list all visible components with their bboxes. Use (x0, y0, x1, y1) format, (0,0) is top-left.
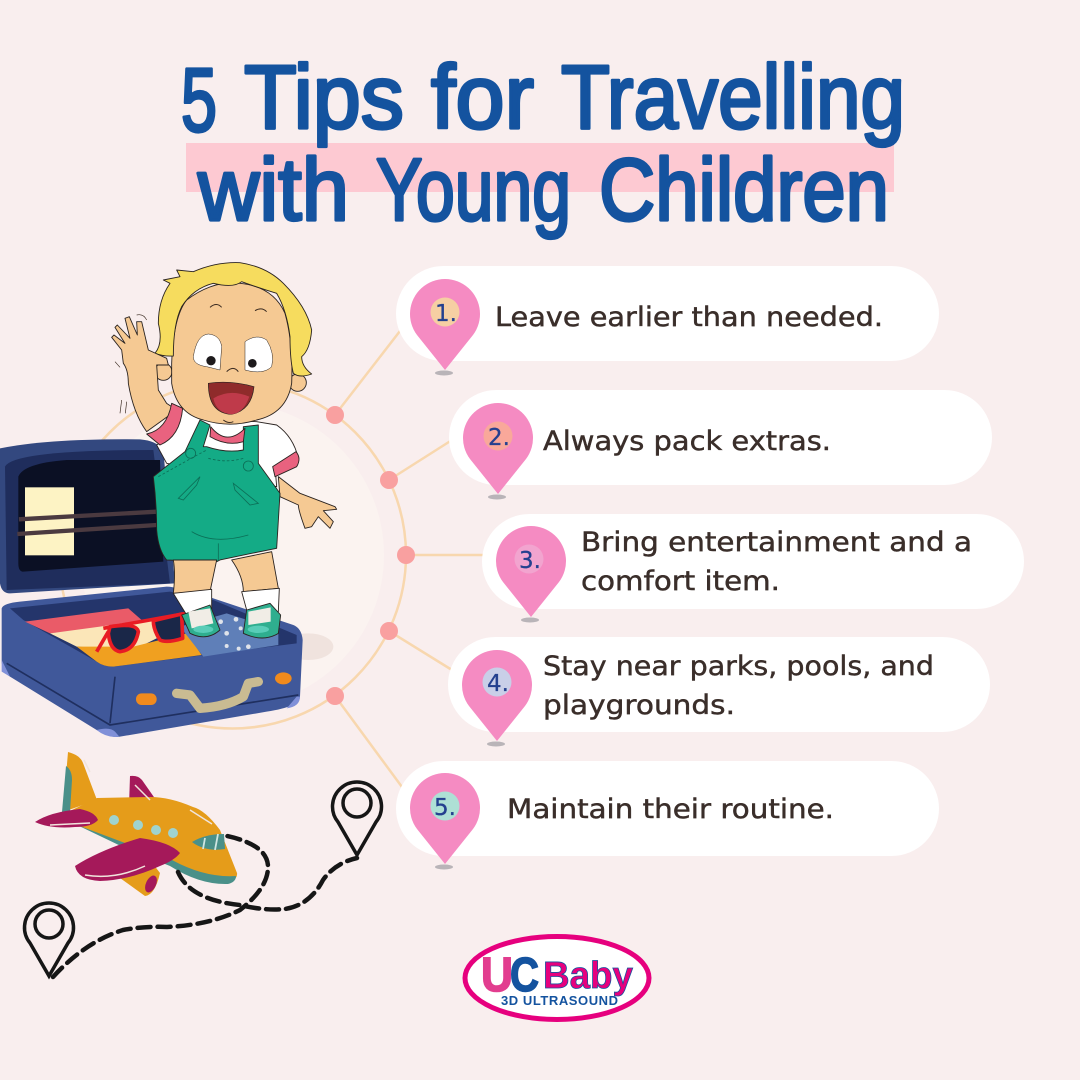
tip 5 (396, 761, 939, 870)
right sleeve cuff (273, 452, 299, 477)
tip 4: 4. (487, 671, 509, 697)
shirt (157, 407, 298, 487)
tip 3 (482, 514, 1024, 622)
logo: UC Baby 3D Ultrasound: C (510, 949, 539, 1002)
open mouth (208, 382, 254, 414)
logo: UC Baby 3D Ultrasound (465, 936, 649, 1020)
tip 3: 3. (519, 548, 541, 574)
illustration: open suitcase (0, 439, 333, 737)
tip 5: Maintain their routine. (507, 794, 834, 825)
tip 2: 2. (488, 425, 510, 451)
motion lines (115, 315, 147, 413)
illustration: sunglasses (97, 613, 187, 652)
illustration: airplane (35, 752, 237, 896)
title: Young (376, 140, 571, 239)
collar (210, 427, 245, 443)
raised arm and hand (112, 317, 177, 432)
tip 5: 5. (434, 795, 456, 821)
logo: UC Baby 3D Ultrasound: Baby (543, 955, 633, 997)
logo: UC Baby 3D Ultrasound: U (481, 949, 513, 1002)
left sleeve cuff (147, 403, 183, 445)
tip 3: comfort item. (581, 566, 780, 597)
tip 1: 1. (435, 301, 457, 327)
overalls (153, 420, 280, 562)
ears (155, 363, 172, 380)
hub circle and connector lines (59, 331, 484, 787)
shoes (182, 605, 220, 637)
tip 4: Stay near parks, pools, and (543, 651, 934, 682)
tip 2 (449, 390, 992, 500)
tip 4: playgrounds. (543, 690, 735, 721)
tip 1: Leave earlier than needed. (495, 302, 883, 333)
tip 4 (448, 637, 990, 746)
title: for (431, 48, 534, 148)
tip 1 (396, 266, 939, 376)
title: Children (599, 140, 889, 239)
logo: UC Baby 3D Ultrasound: 3D ULTRASOUND (501, 993, 618, 1008)
right arm and hand (278, 477, 337, 528)
title: with (197, 140, 349, 239)
illustration: waving toddler (112, 263, 337, 638)
overalls details (158, 448, 258, 560)
title: Tips (244, 48, 404, 148)
head (172, 283, 292, 424)
hair (155, 263, 312, 376)
map pin: origin (24, 903, 74, 976)
tip 3: Bring entertainment and a (581, 527, 972, 558)
eyebrows and nose (210, 304, 267, 423)
title: 5 (181, 51, 217, 151)
legs (173, 560, 217, 593)
title (181, 48, 905, 239)
tip 2: Always pack extras. (543, 426, 831, 457)
title: Travelling (561, 48, 905, 148)
dashed flight route (53, 836, 357, 977)
socks (173, 589, 212, 615)
map pin: destination (332, 782, 381, 855)
eyes (193, 334, 273, 372)
